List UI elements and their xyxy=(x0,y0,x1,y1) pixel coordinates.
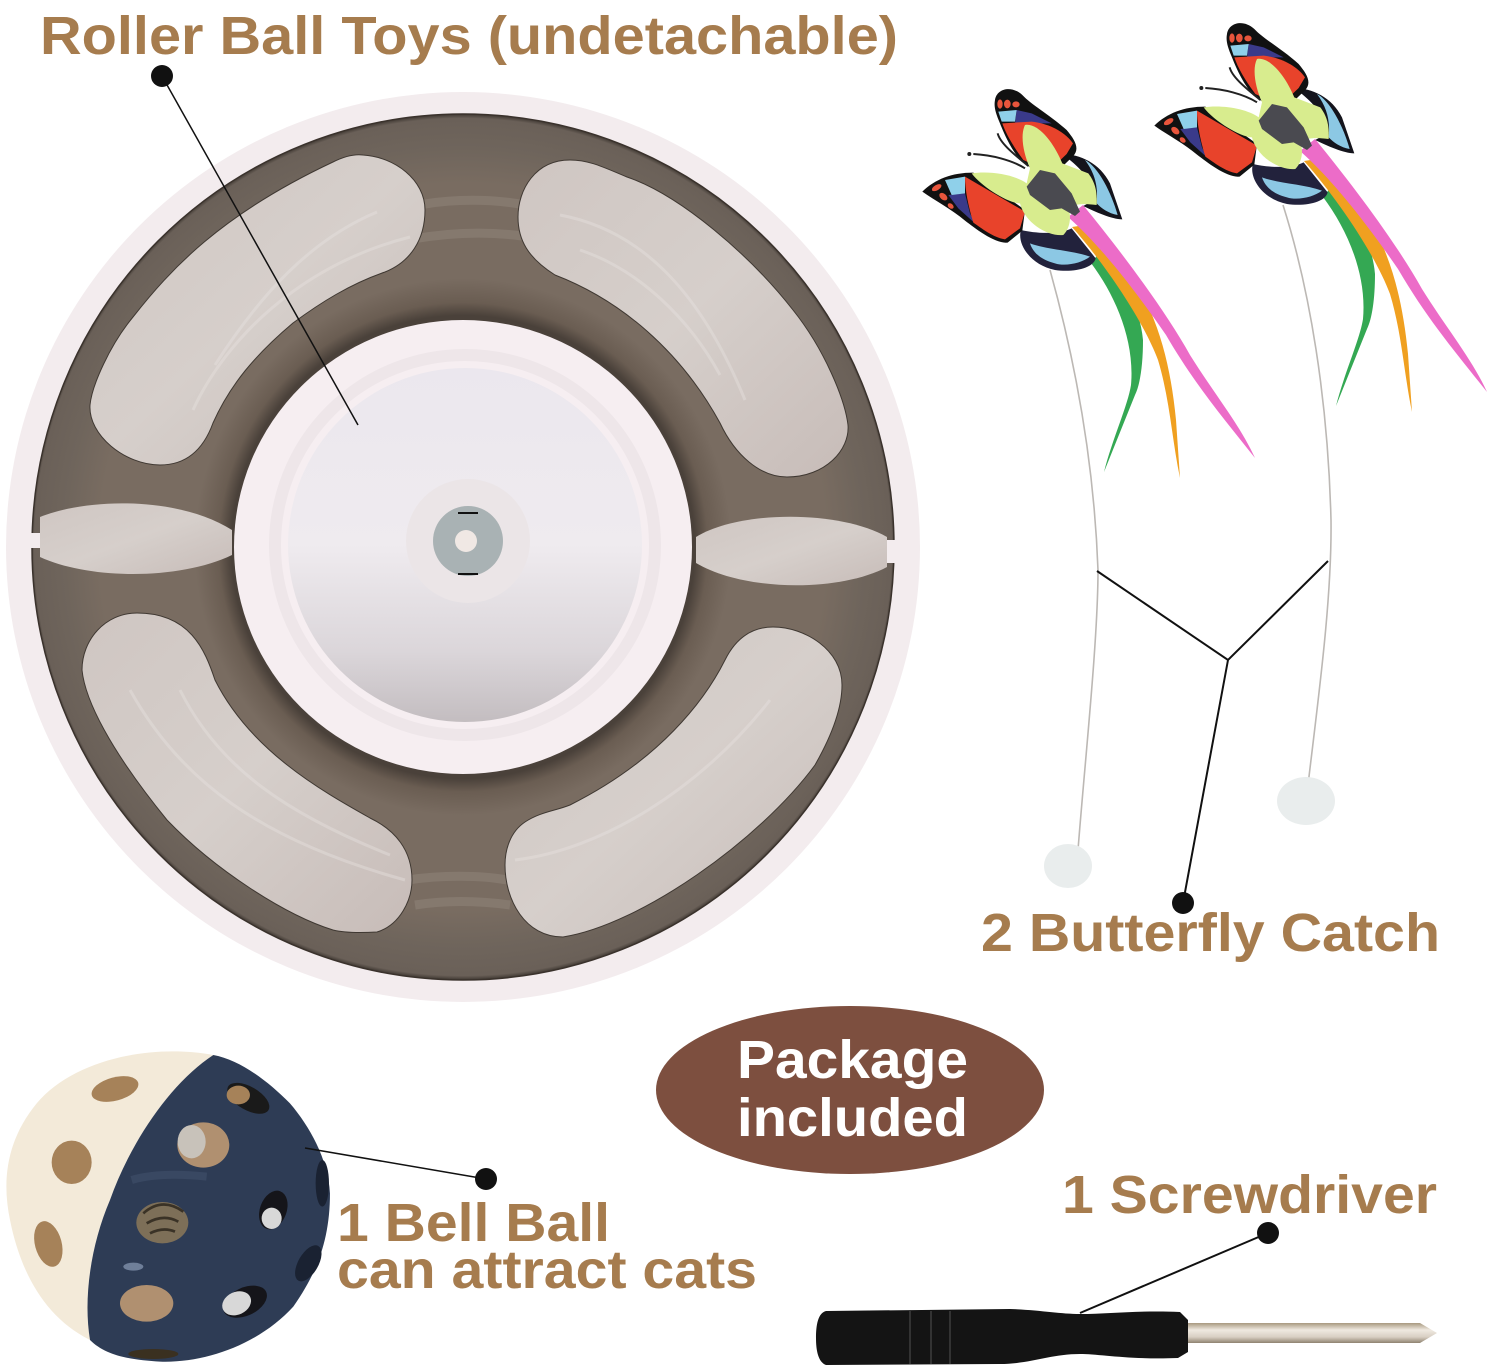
label: butterfly catch: 2 Butterfly Catch xyxy=(981,903,1440,963)
bell xyxy=(136,1202,188,1243)
butterfly 1 xyxy=(922,89,1255,478)
track light streaks xyxy=(408,200,522,905)
label: bell ball: 1 Bell Ball xyxy=(337,1193,610,1253)
callout line: bell ball xyxy=(305,1148,486,1179)
pale cutout: left lens xyxy=(40,503,232,574)
badge text line 1: Package xyxy=(737,1030,968,1090)
callout line: roller ball xyxy=(162,76,358,425)
navy half xyxy=(87,1055,330,1362)
center dome xyxy=(288,368,642,722)
pale cutout: top right xyxy=(518,160,848,477)
badge text line 2: included xyxy=(737,1088,968,1148)
cutout streaks xyxy=(130,212,770,880)
pale cutout: right lens xyxy=(696,517,887,585)
outer white base xyxy=(6,92,920,1002)
pale cutout: bottom left xyxy=(82,613,412,933)
callout dot: butterfly xyxy=(1172,892,1194,914)
callout dot: bell ball xyxy=(475,1168,497,1190)
butterfly 2 wire xyxy=(1283,205,1331,785)
butterfly 1 wire xyxy=(1050,270,1098,850)
brown transparent track xyxy=(32,114,894,980)
bell ball xyxy=(6,1051,330,1362)
suction cup 1 xyxy=(1044,844,1092,888)
toy: roller ball track disc xyxy=(6,92,920,1002)
shaft xyxy=(1186,1323,1437,1343)
handle xyxy=(816,1309,1188,1365)
pale cutout: top left xyxy=(90,155,425,465)
cream half xyxy=(6,1051,213,1340)
center white ring xyxy=(234,320,692,774)
callout dot: roller ball xyxy=(151,65,173,87)
screwdriver xyxy=(816,1309,1437,1365)
center pin xyxy=(455,530,477,552)
label: roller ball toys: Roller Ball Toys (undetachable) xyxy=(40,6,898,66)
label: screwdriver: 1 Screwdriver xyxy=(1062,1165,1437,1225)
suction cup 2 xyxy=(1277,777,1335,825)
callout dot: screwdriver xyxy=(1257,1222,1279,1244)
callout line: screwdriver xyxy=(1080,1233,1268,1313)
side notches xyxy=(29,533,897,563)
pale cutout: bottom right xyxy=(505,627,842,937)
metal washer xyxy=(433,506,503,576)
label: attract cats: can attract cats xyxy=(337,1240,757,1300)
small center circle xyxy=(406,479,530,603)
butterfly 2 xyxy=(1154,23,1487,412)
badge ellipse xyxy=(656,1006,1044,1174)
callout lines: butterfly xyxy=(1097,561,1328,903)
badge: package included xyxy=(656,1006,1044,1174)
